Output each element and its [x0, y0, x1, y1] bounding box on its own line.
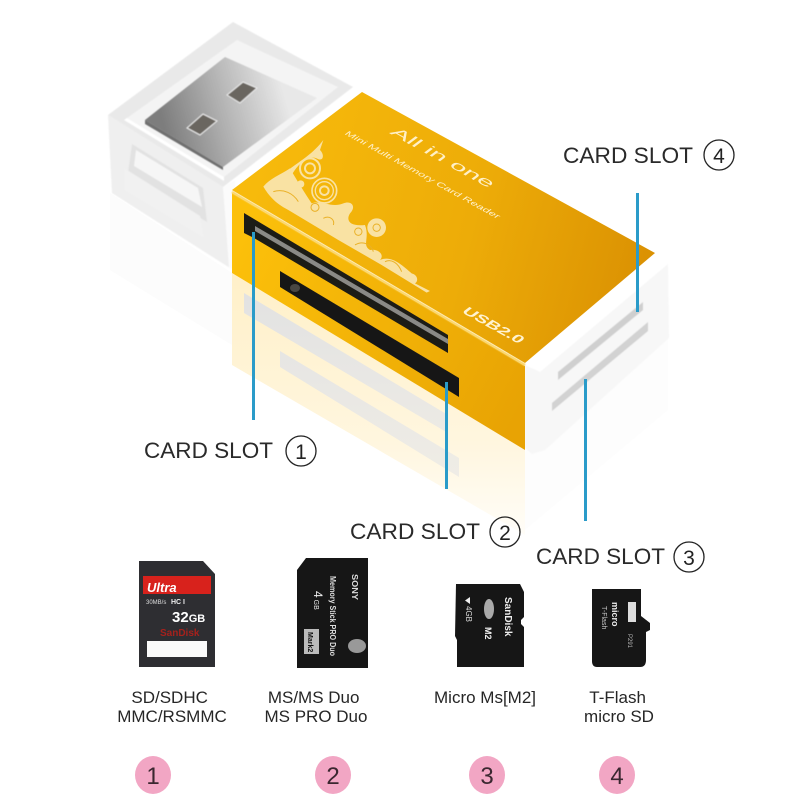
callout: card slot 2: CARD SLOT [350, 519, 480, 544]
MS PRO Duo card: Mark2 [306, 632, 313, 652]
number badge 4 [599, 756, 635, 794]
gold top face [232, 92, 655, 363]
Micro M2 card [455, 584, 524, 667]
pointer line slot 2 [445, 382, 448, 489]
callout: card slot 3: 3 [683, 547, 695, 570]
Micro SD card: micro [610, 602, 620, 627]
number badge 1 [135, 756, 171, 794]
SD card: Ultra [147, 580, 177, 595]
callout: card slot 1: 1 [295, 441, 307, 464]
pointer line slot 3 [584, 379, 587, 521]
slot 1 opening [244, 213, 448, 353]
card reader product [108, 22, 669, 535]
slot 2 opening [280, 271, 459, 397]
USB metal plug [145, 57, 317, 170]
MS PRO Duo card: 4 GB [311, 591, 325, 610]
label: Micro Ms[M2]: Micro Ms[M2] [434, 688, 536, 707]
SD card: 32GB [172, 609, 205, 626]
MS PRO Duo card: SONY [350, 574, 359, 601]
clear USB cap [108, 22, 353, 270]
label: MS/MS Duo: MS PRO Duo [265, 707, 367, 726]
SD card [139, 561, 215, 667]
SD card: HC I [171, 599, 185, 606]
callout: card slot 4: 4 [713, 145, 725, 168]
reflection under reader [110, 193, 668, 535]
USB hole 2 [187, 114, 217, 135]
number badge 2: 2 [326, 763, 340, 790]
USB2.0 label: USB2.0 [458, 305, 528, 346]
pointer line slot 4 [636, 193, 639, 312]
swirl ornament [263, 140, 430, 293]
Micro SD card: T-Flash [600, 606, 607, 629]
Micro SD card [592, 589, 650, 667]
gold edge highlight [232, 192, 525, 365]
number badge 2 [315, 756, 351, 794]
SD card: SanDisk [160, 628, 200, 639]
number badge 3 [469, 756, 505, 794]
Micro M2 card: 4GB [464, 606, 473, 622]
callout: card slot 2: 2 [499, 522, 511, 545]
callout: card slot 1: CARD SLOT [144, 438, 273, 463]
number badge 1: 1 [146, 763, 160, 790]
callout: card slot 3: CARD SLOT [536, 544, 665, 569]
number badge 4: 4 [610, 763, 624, 790]
number badge 3: 3 [480, 763, 494, 790]
callout: card slot 4: CARD SLOT [563, 143, 693, 168]
label: SD/SDHC: SD/SDHC [131, 688, 208, 707]
gold front face [232, 193, 525, 450]
all in one heading: All in one [386, 125, 499, 191]
callout: card slot 4 [563, 140, 734, 170]
Micro M2 card: M2 [483, 627, 493, 640]
white end cap [525, 252, 669, 454]
SD card: 30MB/s [146, 600, 166, 606]
callout: card slot 1 [144, 436, 316, 466]
reader subtitle: Mini Multi Memory Card Reader [342, 129, 503, 220]
label: T-Flash micro SD: micro SD [584, 707, 654, 726]
label: SD/SDHC: MMC/RSMMC [117, 707, 227, 726]
MS PRO Duo card: Memory Stick PRO Duo [328, 576, 337, 656]
label: MS/MS Duo: MS/MS Duo [268, 688, 359, 707]
callout: card slot 3 [536, 542, 704, 572]
Micro M2 card: SanDisk [502, 597, 513, 637]
USB hole 1 [227, 82, 257, 103]
label: T-Flash micro SD: T-Flash [589, 688, 646, 707]
callout: card slot 2 [350, 517, 520, 547]
Micro SD card: P291 [626, 634, 632, 649]
pointer line slot 1 [252, 232, 255, 420]
MS PRO Duo card [297, 558, 368, 668]
